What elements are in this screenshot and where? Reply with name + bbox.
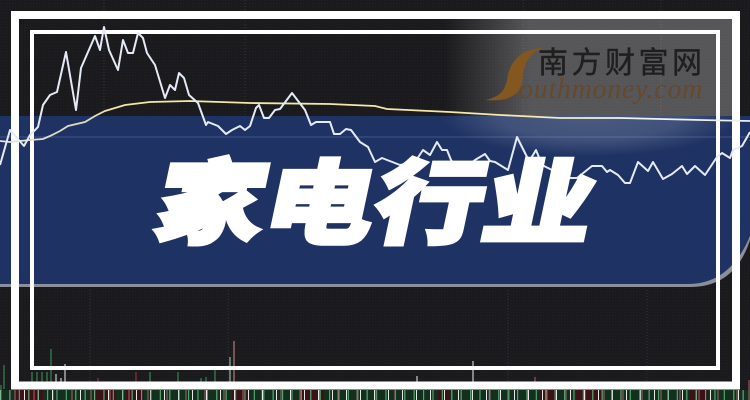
- glossy highlight: [440, 19, 740, 158]
- logo: southmoney: [485, 47, 706, 105]
- grid lines: [90, 0, 661, 400]
- price line: [0, 27, 750, 183]
- logo chinese name: 南方财富网: [538, 47, 706, 80]
- inner frame: [32, 32, 718, 368]
- panel: blue band: [0, 116, 750, 287]
- logo domain: outhmoney.com: [519, 74, 703, 105]
- logo swoosh: [485, 48, 543, 100]
- title: 家电行业: [146, 153, 606, 256]
- moving average line: [0, 101, 750, 142]
- volume bars: [0, 341, 750, 400]
